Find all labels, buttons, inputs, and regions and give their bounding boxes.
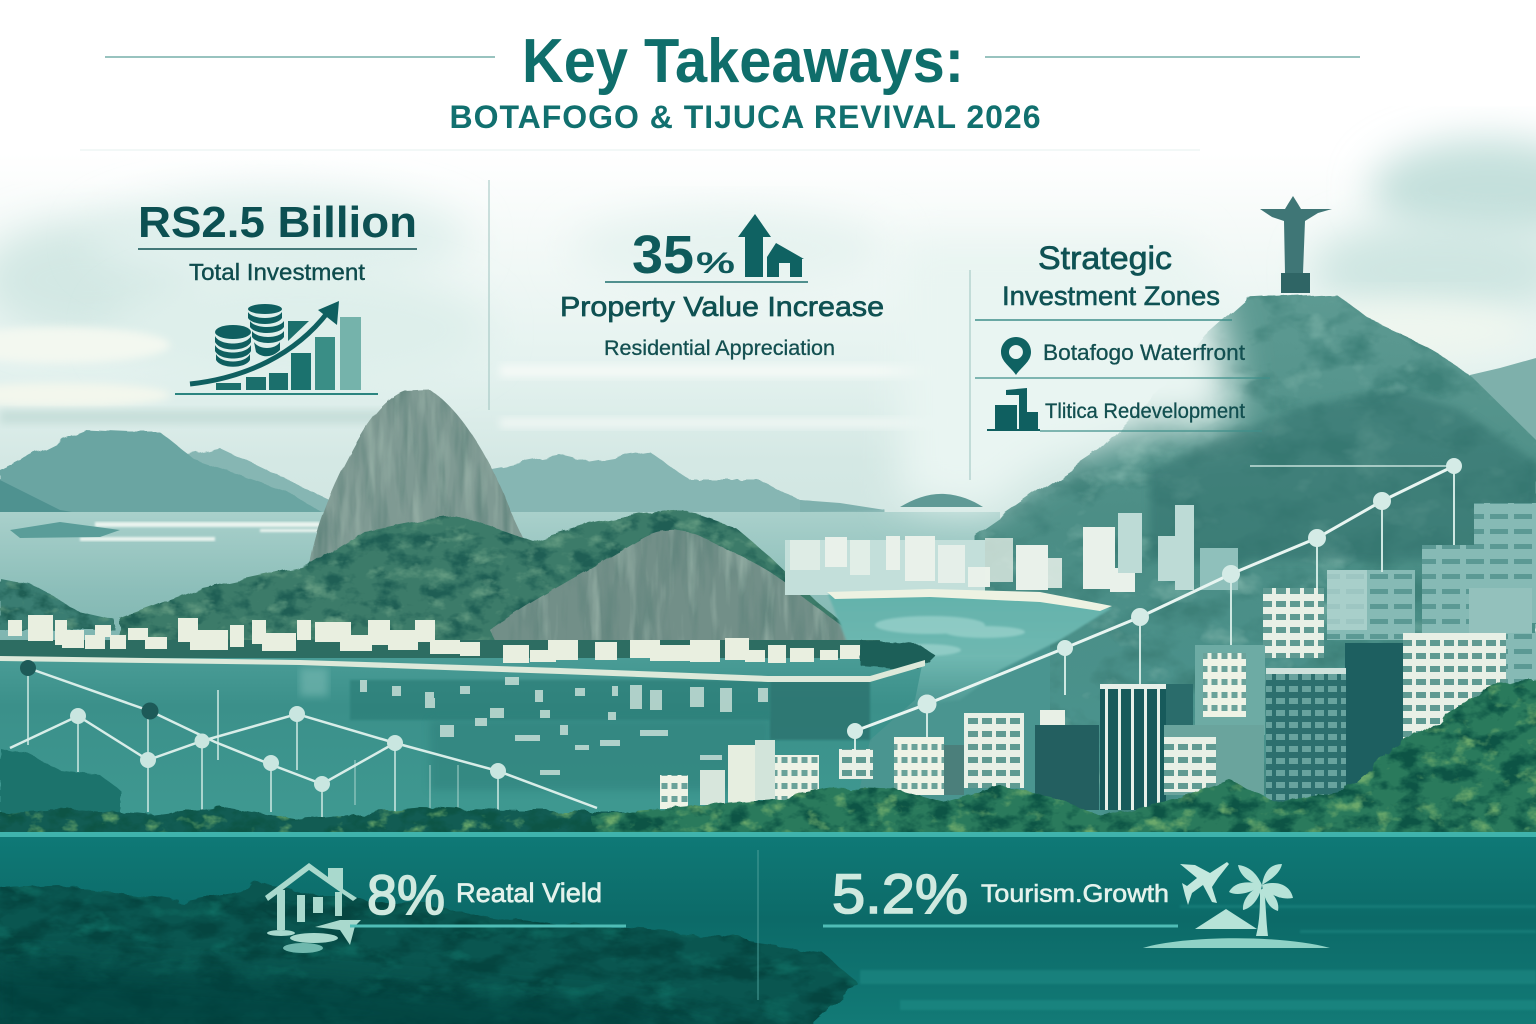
clouds	[0, 138, 1536, 428]
lagoon	[828, 592, 1112, 710]
icon: coins and rising bars	[175, 301, 378, 394]
bay reflections	[300, 668, 870, 790]
left hill	[0, 748, 120, 835]
distant mountains middle	[120, 448, 885, 520]
zone: Botafogo Waterfront: Botafogo Waterfront	[1043, 340, 1245, 365]
icon: house with up arrow	[738, 214, 804, 277]
label: Reatal Vield	[456, 878, 602, 908]
icon: map pin	[1001, 337, 1031, 375]
small island	[900, 494, 983, 507]
Corcovado dark ridge	[1150, 390, 1536, 560]
stat: property value: %	[696, 247, 735, 280]
figure: RS2.5 Billion	[138, 198, 417, 247]
subtitle: BOTAFOGO & TIJUCA REVIVAL 2026	[450, 99, 1040, 135]
shoreline neighbourhood	[0, 615, 935, 670]
water ripples	[860, 905, 1536, 1010]
left foreground ridge	[0, 480, 330, 530]
icon: palm tree on island	[1143, 864, 1330, 948]
stat: rental yield	[265, 863, 626, 953]
beach road	[0, 656, 925, 682]
distant city	[785, 505, 1238, 595]
mist over Corcovado	[900, 240, 1235, 510]
icon: house	[265, 863, 361, 953]
distant mountains left	[0, 430, 330, 530]
bottom band	[0, 833, 1536, 1024]
teal ground under chart	[850, 640, 1050, 835]
zone: Tlitica Redevelopment: Tlitica Redevelopment	[1045, 400, 1245, 423]
stat: property value	[560, 214, 884, 360]
stat: tourism growth	[823, 862, 1330, 948]
figure: 35	[632, 225, 694, 285]
stat: total investment	[138, 198, 417, 394]
icon: plane	[1180, 862, 1229, 905]
band top highlight	[0, 832, 1536, 837]
rock face	[490, 530, 868, 650]
dark tree line	[0, 806, 760, 840]
icon: buildings	[987, 388, 1040, 431]
mid-city buildings	[660, 740, 819, 809]
title block	[450, 27, 1040, 135]
bottom left forest	[0, 885, 860, 1024]
label: Tourism.Growth	[981, 880, 1169, 908]
left headland	[0, 578, 115, 630]
left line chart	[10, 660, 597, 820]
green hills	[120, 509, 870, 655]
lagoon sand	[827, 589, 1112, 611]
bottom edge shadow	[0, 960, 800, 1024]
label: Property Value Increase	[560, 291, 884, 322]
foreground foliage	[590, 680, 1536, 840]
sublabel: Residential Appreciation	[604, 337, 835, 360]
stat: investment zones	[975, 240, 1270, 431]
far right towers	[1327, 503, 1536, 693]
bay water	[0, 650, 925, 835]
Corcovado far ridge	[1470, 358, 1536, 520]
figure: 5.2%	[832, 862, 968, 925]
water streaks	[80, 522, 320, 541]
lagoon ripples	[875, 616, 1025, 656]
distant mountain tail	[800, 500, 885, 512]
foreground towers	[839, 588, 1506, 810]
islet in bay	[10, 522, 120, 538]
Corcovado mountain	[975, 293, 1536, 830]
figure: 8%	[367, 863, 445, 926]
title: Key Takeaways:	[522, 27, 964, 96]
right line chart	[847, 458, 1462, 739]
Sugarloaf	[310, 390, 524, 570]
water	[0, 512, 1000, 662]
stat: investment zones: Investment Zones	[1002, 281, 1220, 311]
right line chart stems	[855, 466, 1454, 750]
label: Total Investment	[189, 259, 366, 285]
statue: Christ the Redeemer	[1260, 196, 1332, 293]
heading: Strategic	[1038, 240, 1172, 276]
